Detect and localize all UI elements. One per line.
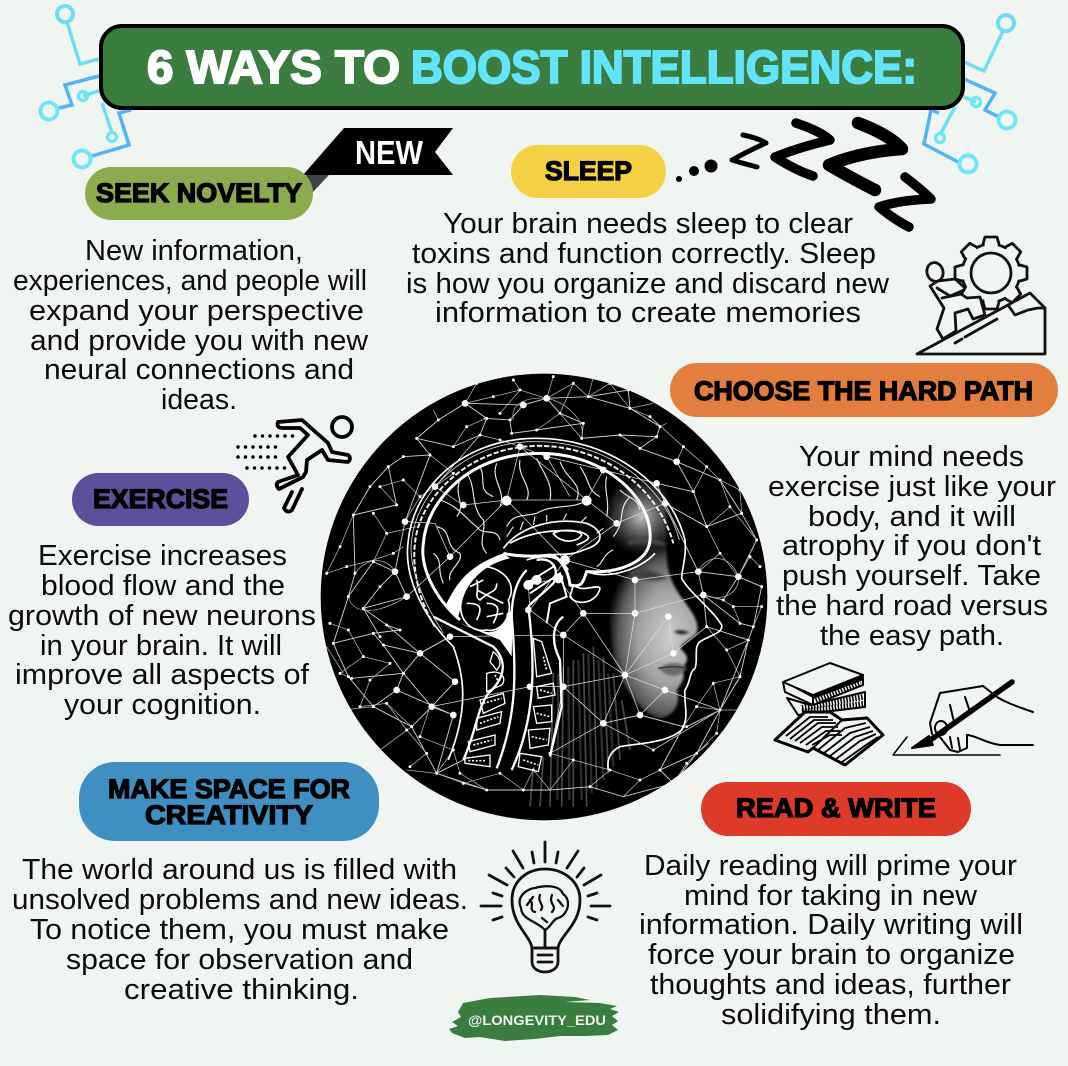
heading: exercise [72,473,249,526]
heading: choose the hard path: CHOOSE THE HARD PATH [694,376,1033,406]
heading: make space for creativity [79,762,379,841]
heading: sleep: SLEEP [545,156,632,186]
text: sleep: Your brain needs sleep to clear [443,208,854,240]
network nodes [327,377,762,790]
text: seek novelty: and provide you with new [30,325,368,357]
text: choose the hard path: exercise just like your [768,471,1057,503]
new ribbon [303,128,453,192]
text: creativity: space for observation and [66,944,413,976]
text: exercise: improve all aspects of [15,659,309,691]
spinal cord and vertebrae [433,559,563,770]
icon: hand writing with pen [893,682,1033,755]
text: sleep: toxins and function correctly. Sleep [412,238,876,270]
text: read and write: solidifying them. [721,999,941,1031]
text: creativity: The world around us is filled with [22,854,457,886]
icon: person pushing gear uphill [917,237,1045,354]
text: read and write: thoughts and ideas, further [650,969,1012,1001]
title banner: 6 WAYS TO [147,41,400,93]
icon: light bulb with brain [481,842,610,972]
text: creativity: To notice them, you must make [30,914,449,946]
text: choose the hard path: atrophy if you don't [782,530,1041,562]
text: exercise: your cognition. [64,689,261,721]
text: read and write: Daily reading will prime your [644,850,1018,882]
handle badge: brush stroke [449,995,619,1041]
text: seek novelty [13,235,368,416]
text: creativity [12,854,468,1006]
text: seek novelty: New information, [85,235,303,267]
text: exercise [8,540,316,721]
title banner: BOOST INTELLIGENCE: [411,41,917,93]
text: read and write: mind for taking in new [684,880,977,912]
text: seek novelty: expand your perspective [29,295,364,327]
panel: make space for creativity [12,762,468,1006]
heading: choose the hard path [670,363,1058,417]
text: exercise: growth of new neurons [8,600,316,632]
text: sleep: information to create memories [435,297,861,329]
icon: snoring z letters [676,123,931,227]
icon: circuit right [924,15,1016,172]
central image: brain and face in network sphere [321,374,767,820]
text: choose the hard path: the easy path. [820,620,1004,652]
corpus callosum and folds [503,521,655,602]
heading: exercise: EXERCISE [93,484,228,514]
text: seek novelty: experiences, and people will [13,265,367,297]
star network lines [333,390,762,797]
text: choose the hard path: Your mind needs [799,441,1024,473]
text: creativity: unsolved problems and new ideas. [12,884,468,916]
text: sleep [406,208,889,329]
text: choose the hard path: push yourself. Take [782,560,1041,592]
heading: make space for creativity: MAKE SPACE FOR [108,774,350,804]
panel: seek novelty [13,128,453,416]
heading: seek novelty [85,167,313,220]
text: exercise: Exercise increases [38,540,287,572]
text: choose the hard path: the hard road versus [776,590,1048,622]
text: exercise: blood flow and the [41,570,285,602]
heading: make space for creativity: CREATIVITY [145,800,313,830]
text: choose the hard path: body, and it will [808,501,1016,533]
text: choose the hard path [768,441,1057,652]
text: read and write [639,850,1023,1031]
heading: seek novelty: SEEK NOVELTY [96,178,302,208]
text: sleep: is how you organize and discard new [406,268,889,300]
heading: read and write: READ & WRITE [736,793,936,823]
text: read and write: information. Daily writing will [639,909,1023,941]
heading: sleep [511,145,666,198]
text: exercise: in your brain. It will [40,630,282,662]
icon: runner [238,417,352,512]
title banner [101,26,963,108]
handle badge: brush stroke: @LONGEVITY_EDU [468,1012,606,1028]
panel: sleep [406,123,931,329]
head profile outline [407,438,722,770]
cerebellum [461,567,511,630]
icon: stack of books [775,663,883,765]
new ribbon: NEW [355,134,424,171]
icon: circuit left [40,6,131,168]
text: read and write: force your brain to organize [648,939,1015,971]
brain outline [423,453,650,620]
text: seek novelty: neural connections and [44,354,354,386]
text: seek novelty: ideas. [161,384,237,416]
text: creativity: creative thinking. [124,974,359,1006]
heading: read and write [701,782,971,836]
